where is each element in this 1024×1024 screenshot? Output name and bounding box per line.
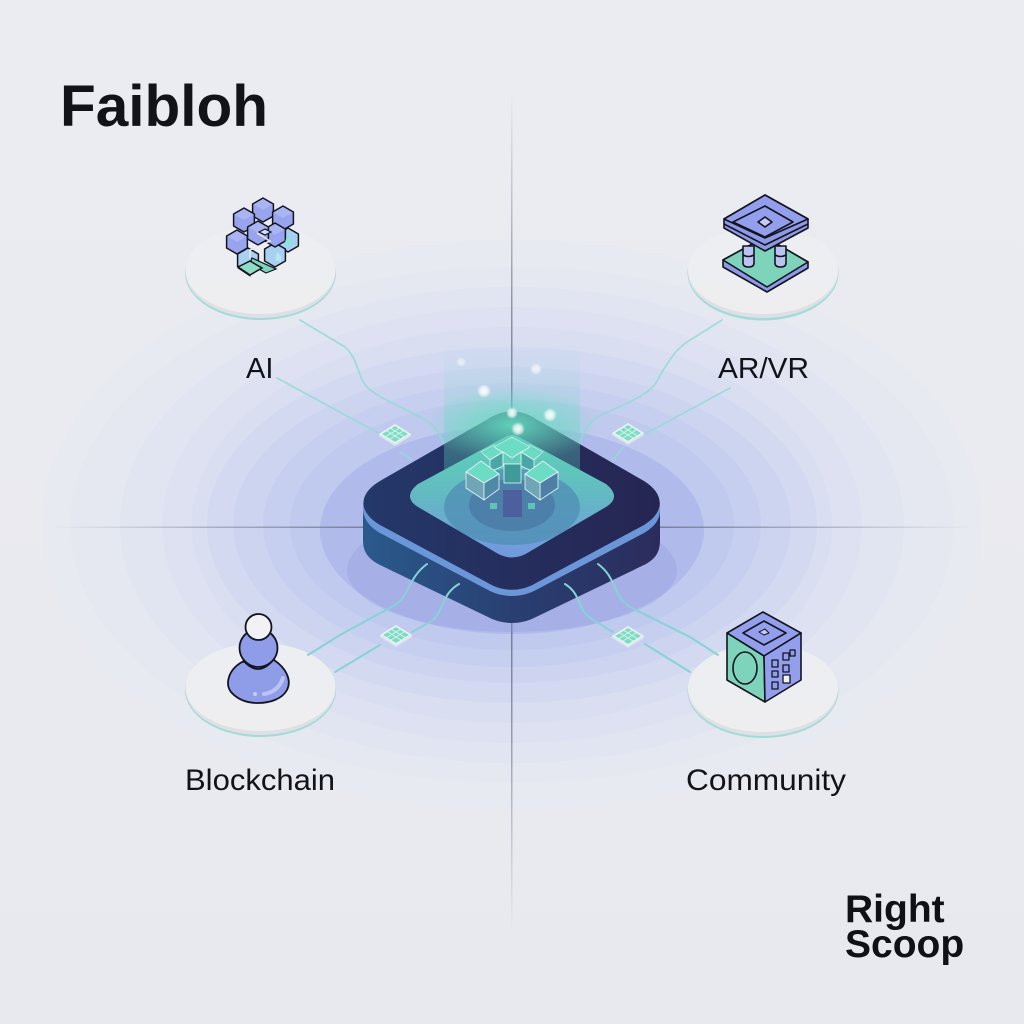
node: Community	[686, 612, 846, 797]
well inner discs	[444, 469, 580, 545]
platform base	[363, 503, 660, 623]
disc	[185, 643, 336, 737]
disc	[185, 226, 336, 320]
platform top face	[364, 412, 660, 590]
glowing particles	[456, 357, 557, 436]
top green glow	[427, 387, 597, 463]
label: Community: Community	[686, 764, 846, 797]
upper connector lines	[277, 320, 730, 462]
label: AI: AI	[246, 353, 273, 385]
disc	[688, 644, 838, 738]
disc	[688, 226, 838, 320]
lower connector lines	[308, 564, 718, 672]
node: Blockchain	[185, 614, 336, 797]
label: Blockchain: Blockchain	[185, 764, 335, 797]
brand logo	[845, 888, 964, 966]
brand logo: Scoop	[845, 923, 964, 966]
icon: pawn	[228, 614, 289, 703]
icon: cube	[727, 612, 801, 702]
cubes cluster	[466, 437, 558, 517]
icon: hexagon cluster	[227, 198, 298, 276]
blue strip	[363, 503, 660, 596]
label: AR/VR: AR/VR	[718, 353, 809, 385]
platform shadow	[347, 508, 677, 632]
title: Faibloh	[60, 74, 268, 139]
node: AR/VR	[688, 195, 838, 385]
chips on connectors	[379, 423, 644, 648]
well	[410, 435, 614, 558]
brand logo: Right	[845, 888, 945, 931]
icon: layered chip	[723, 195, 808, 292]
node: AI	[185, 198, 336, 385]
central platform	[347, 345, 677, 632]
axis lines	[50, 90, 975, 930]
light beam	[444, 345, 580, 480]
concentric ripple rings	[42, 240, 982, 810]
